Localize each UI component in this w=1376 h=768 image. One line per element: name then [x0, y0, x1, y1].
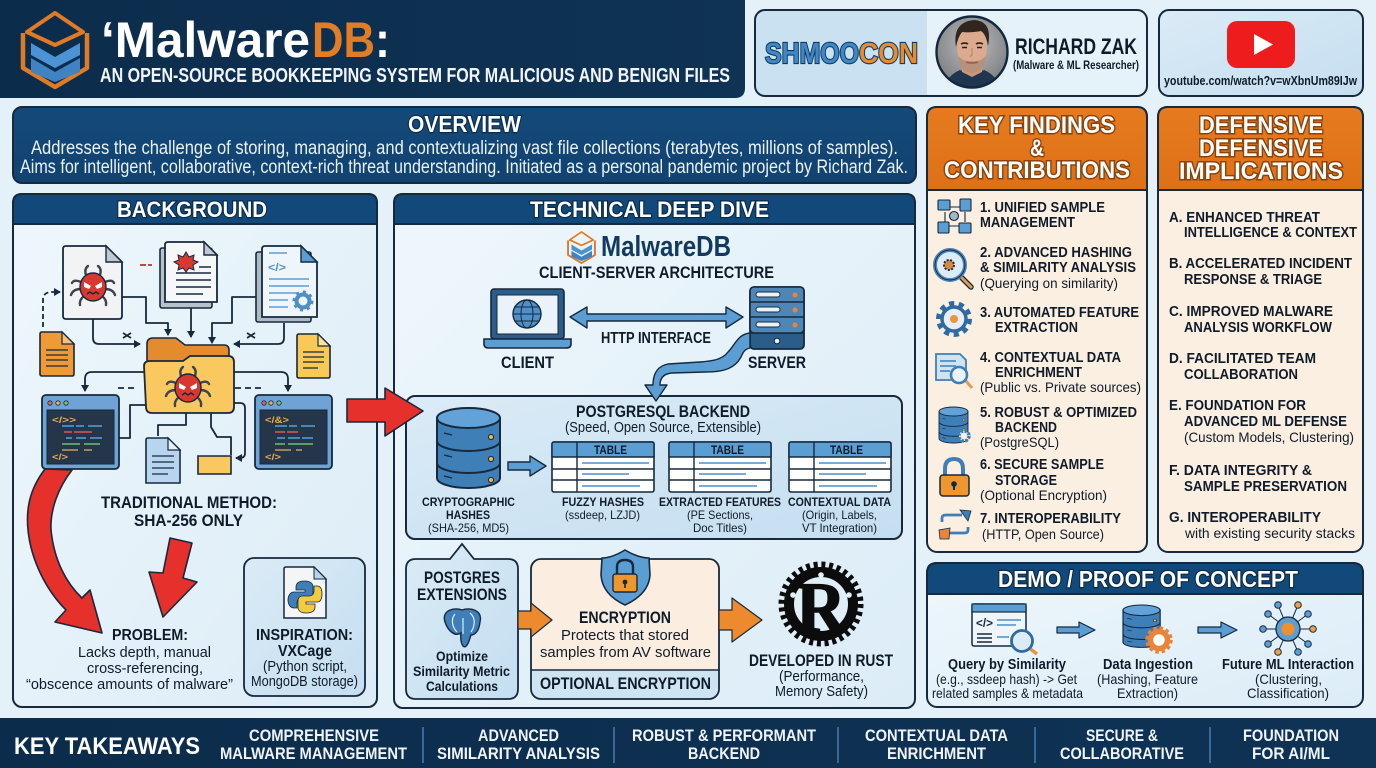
icon: left code window: </> [52, 452, 68, 462]
icon: right code window: </> [265, 452, 281, 462]
speaker portrait [936, 16, 1008, 90]
icon: small yellow folder [198, 456, 231, 474]
takeaway: comprehensive malware management: COMPREHENSIVE [249, 726, 379, 745]
title: ‘Malware [101, 12, 310, 68]
finding 4: ENRICHMENT [995, 365, 1082, 381]
heading: postgresql backend: POSTGRESQL BACKEND [576, 402, 750, 421]
finding 5: BACKEND [995, 420, 1057, 436]
label: extracted features: (PE Sections, [687, 508, 753, 522]
icon: encryption shield [601, 550, 650, 605]
speaker card [755, 10, 1147, 96]
label: fuzzy hashes: (ssdeep, LZJD) [565, 508, 640, 522]
callout: inspiration VXCage: VXCage [278, 643, 332, 660]
implications list: RESPONSE & TRIAGE [1184, 272, 1322, 288]
connector arrows [43, 265, 288, 458]
label: fuzzy hashes: FUZZY HASHES [562, 495, 644, 509]
rust text: Memory Safety) [775, 684, 868, 700]
takeaway: advanced similarity analysis: ADVANCED [478, 726, 559, 745]
finding 2 [935, 245, 1136, 291]
table: fuzzy hashes: TABLE [594, 443, 627, 457]
MalwareDB logo [568, 231, 731, 263]
panel: key findings and contributions [927, 107, 1147, 552]
takeaway: robust and performant backend: ROBUST & PERFORMANT [632, 726, 817, 745]
SHMOOCON logo: SHMOO [765, 38, 859, 70]
arrow: server to backend [645, 333, 750, 401]
client label: CLIENT [501, 353, 555, 372]
callout: inspiration VXCage: (Python script, [263, 659, 347, 675]
label: extracted features: Doc Titles) [693, 521, 747, 535]
takeaway: secure and collaborative: COLLABORATIVE [1060, 744, 1184, 763]
demo step: future ML interaction [1222, 657, 1354, 701]
callout: optional encryption: samples from AV software [540, 644, 711, 661]
server label: SERVER [748, 353, 806, 372]
icon: right code window: </&> [265, 415, 289, 425]
finding 7 [939, 510, 1121, 542]
finding 4 [936, 350, 1141, 395]
callout: postgres extensions: Optimize [436, 649, 488, 664]
icon: ML network [1260, 602, 1316, 655]
icon: small blue document [146, 438, 180, 483]
icon: code document with gear [256, 246, 317, 322]
callout: postgres extensions: Similarity Metric [413, 664, 510, 679]
arrow: demo step 1 to 2 [1057, 622, 1095, 638]
callout: inspiration VXCage: INSPIRATION: [256, 627, 353, 644]
implications list: G. INTEROPERABILITY [1169, 510, 1321, 526]
panel: defensive implications [1158, 107, 1363, 552]
speaker role: (Malware & ML Researcher) [1013, 60, 1139, 72]
arrow: straight red arrow to problem [149, 538, 197, 617]
table: extracted features [669, 442, 771, 492]
demo step: query by similarity [932, 657, 1083, 701]
callout: inspiration VXCage [244, 558, 365, 696]
takeaway: contextual data enrichment: ENRICHMENT [887, 744, 987, 763]
title: : [375, 12, 390, 68]
heading: key findings: KEY FINDINGS [958, 112, 1115, 139]
panel: overview [13, 107, 916, 183]
panel: technical deep dive [394, 194, 915, 708]
icon: Rust logo [782, 564, 860, 648]
overview text [20, 138, 908, 178]
icon: left code window [42, 395, 119, 469]
icon: server [750, 287, 804, 349]
heading: technical deep dive: TECHNICAL DEEP DIVE [530, 197, 769, 222]
callout: postgres extensions: POSTGRES [424, 569, 500, 587]
finding 7: 7. INTEROPERABILITY [980, 511, 1121, 527]
label: extracted features: EXTRACTED FEATURES [659, 495, 781, 509]
finding 6: STORAGE [995, 473, 1057, 489]
callout: optional encryption: ENCRYPTION [579, 608, 671, 627]
problem text: Lacks depth, manual [78, 644, 211, 661]
panel: demo / proof of concept [927, 563, 1363, 707]
implications list: A. ENHANCED THREAT [1169, 210, 1320, 226]
finding 6: (Optional Encryption) [980, 487, 1107, 503]
heading: key findings [944, 112, 1130, 184]
implications list: INTELLIGENCE & CONTEXT [1184, 225, 1357, 241]
demo step: data ingestion: Data Ingestion [1103, 657, 1193, 673]
takeaway: robust and performant backend: BACKEND [688, 744, 760, 763]
finding 6: 6. SECURE SAMPLE [980, 457, 1104, 473]
label: contextual data: (Origin, Labels, [802, 508, 877, 522]
takeaway: comprehensive malware management: MALWARE MANAGEMENT [220, 744, 408, 763]
implications list: C. IMPROVED MALWARE [1169, 304, 1333, 320]
label: contextual data: CONTEXTUAL DATA [788, 495, 891, 509]
takeaway: comprehensive malware management [220, 726, 408, 763]
table: extracted features: TABLE [711, 443, 744, 457]
finding 2: (Querying on similarity) [980, 275, 1118, 291]
takeaway: foundation for AI/ML: FOR AI/ML [1252, 744, 1330, 763]
demo step: query by similarity: Query by Similarity [948, 657, 1066, 673]
rust text: (Performance, [779, 669, 864, 685]
implications list: F. DATA INTEGRITY & [1169, 463, 1312, 479]
rust text [749, 652, 893, 700]
callout: postgresql backend [406, 396, 902, 539]
takeaway: foundation for AI/ML [1243, 726, 1339, 763]
implications list [1169, 210, 1357, 541]
problem text [26, 627, 233, 693]
postgresql backend subtitle: (Speed, Open Source, Extensible) [565, 419, 761, 436]
icon: laptop client [484, 289, 571, 348]
arrow: encryption to rust [719, 598, 762, 642]
demo step: query by similarity: related samples & metadata [932, 685, 1083, 701]
rust text: DEVELOPED IN RUST [749, 652, 893, 670]
label: cryptographic hashes: (SHA-256, MD5) [428, 521, 509, 535]
icon: threat report document [160, 242, 217, 308]
MalwareDB logo: MalwareDB [601, 231, 731, 263]
arrow: HTTP interface double arrow [570, 307, 743, 328]
icon: code document with gear: </> [268, 262, 286, 274]
implications list: SAMPLE PRESERVATION [1184, 479, 1347, 495]
icon: document with magnifier [936, 354, 972, 388]
heading: defensive implications: DEFENSIVE [1199, 135, 1323, 162]
demo step: data ingestion: Extraction) [1117, 685, 1178, 701]
finding 7: (HTTP, Open Source) [982, 526, 1104, 542]
heading: key findings: & [1030, 135, 1044, 162]
table: fuzzy hashes [552, 442, 654, 492]
label: cryptographic hashes: CRYPTOGRAPHIC [422, 495, 515, 509]
callout: optional encryption: OPTIONAL ENCRYPTION [540, 675, 711, 693]
demo step: query by similarity: (e.g., ssdeep hash) -> Get [936, 671, 1077, 687]
speaker name: RICHARD ZAK [1015, 34, 1137, 59]
label: extracted features [659, 495, 781, 535]
icon: query window with magnifier: </> [976, 616, 993, 630]
heading: client-server architecture: CLIENT-SERVER ARCHITECTURE [539, 263, 774, 282]
heading: key takeaways: KEY TAKEAWAYS [14, 733, 200, 760]
HTTP interface label: HTTP INTERFACE [601, 330, 711, 347]
heading: traditional method: TRADITIONAL METHOD: [101, 494, 277, 512]
problem text: “obscence amounts of malware” [26, 676, 233, 693]
callout: postgres extensions: Calculations [426, 679, 498, 694]
label: fuzzy hashes [562, 495, 644, 522]
icon: YouTube play [1227, 21, 1295, 68]
panel: background [13, 194, 377, 707]
finding 1: 1. UNIFIED SAMPLE [980, 200, 1105, 216]
finding 3 [939, 304, 1139, 336]
callout: postgres extensions: EXTENSIONS [417, 586, 507, 604]
icon: left code window: </>> [52, 415, 76, 425]
finding 1 [938, 199, 1105, 233]
finding 6 [940, 457, 1107, 503]
implications list: ADVANCED ML DEFENSE [1184, 414, 1347, 430]
overview text: Addresses the challenge of storing, managing, and contextualizing vast file collections (terabytes, millions of samples). [31, 138, 898, 159]
icon: Rust logo: R [796, 568, 847, 648]
title banner [0, 0, 745, 98]
implications list: (Custom Models, Clustering) [1184, 429, 1354, 445]
heading: defensive implications [1179, 112, 1343, 185]
implications list: B. ACCELERATED INCIDENT [1169, 256, 1352, 272]
icon: postgres elephant [444, 609, 480, 647]
icon: database with gear [939, 407, 969, 443]
heading: defensive implications: IMPLICATIONS [1179, 158, 1343, 185]
heading: demo: DEMO / PROOF OF CONCEPT [998, 566, 1298, 592]
heading: key findings: CONTRIBUTIONS [944, 157, 1130, 184]
subtitle: AN OPEN-SOURCE BOOKKEEPING SYSTEM FOR MALICIOUS AND BENIGN FILES [100, 65, 730, 87]
finding 3: EXTRACTION [995, 320, 1078, 336]
finding 1: MANAGEMENT [980, 215, 1075, 231]
callout: postgres extensions [406, 544, 518, 699]
label: cryptographic hashes [422, 495, 515, 535]
label: contextual data [788, 495, 891, 535]
icon: orange document [40, 332, 74, 376]
problem text: PROBLEM: [112, 627, 188, 644]
heading: traditional method: SHA-256 ONLY [134, 512, 243, 530]
callout: inspiration VXCage: MongoDB storage) [251, 674, 358, 690]
heading: traditional method [101, 494, 277, 530]
icon: magnifier with gear [935, 250, 971, 287]
heading: overview: OVERVIEW [408, 111, 521, 137]
icon: gear with bug [939, 304, 969, 334]
finding 5 [939, 405, 1137, 450]
video link card [1159, 10, 1363, 96]
takeaway: secure and collaborative: SECURE & [1086, 726, 1158, 745]
callout: optional encryption: Protects that stored [561, 627, 689, 644]
icon: interoperability arrows [939, 510, 971, 539]
implications list: with existing security stacks [1184, 525, 1355, 541]
callout: optional encryption [531, 550, 719, 699]
icon: MalwareDB cube logo [23, 13, 87, 87]
takeaway: advanced similarity analysis: SIMILARITY ANALYSIS [437, 744, 600, 763]
icon: unified management network [938, 199, 971, 233]
demo step: future ML interaction: Classification) [1247, 685, 1329, 701]
overview text: Aims for intelligent, collaborative, context-rich threat understanding. Initiated as a personal pandemic project by Richard Zak. [20, 157, 908, 178]
icon: database with gear [1123, 605, 1171, 652]
arrow: curved red arrow to problem [27, 469, 102, 633]
icon: malware file [63, 246, 122, 319]
implications list: ANALYSIS WORKFLOW [1184, 320, 1332, 336]
icon: python file [284, 567, 326, 618]
finding 2: 2. ADVANCED HASHING [980, 245, 1132, 261]
takeaway: foundation for AI/ML: FOUNDATION [1243, 726, 1339, 745]
problem text: cross-referencing, [87, 660, 203, 677]
icon: query window with magnifier [972, 604, 1037, 654]
key takeaways bar [0, 718, 1376, 768]
finding 2: & SIMILARITY ANALYSIS [980, 260, 1136, 276]
heading: background: BACKGROUND [117, 197, 267, 222]
icon: database [437, 408, 500, 488]
heading: defensive implications: DEFENSIVE [1199, 112, 1323, 139]
takeaway: secure and collaborative [1060, 726, 1184, 763]
takeaway: contextual data enrichment [865, 726, 1008, 763]
finding 4: 4. CONTEXTUAL DATA [980, 350, 1121, 366]
icon: right code window [255, 395, 332, 469]
finding 5: 5. ROBUST & OPTIMIZED [980, 405, 1137, 421]
finding 5: (PostgreSQL) [980, 434, 1059, 450]
arrow: extensions to encryption [518, 603, 552, 637]
label: contextual data: VT Integration) [802, 521, 877, 535]
takeaway: advanced similarity analysis [437, 726, 600, 763]
implications list: D. FACILITATED TEAM [1169, 351, 1316, 367]
implications list: E. FOUNDATION FOR [1169, 398, 1306, 414]
arrow: red arrow from background to technical [347, 388, 423, 436]
demo step: data ingestion: (Hashing, Feature [1097, 671, 1198, 687]
demo step: future ML interaction: (Clustering, [1255, 671, 1322, 687]
takeaway: contextual data enrichment: CONTEXTUAL DATA [865, 726, 1008, 745]
arrow: database to tables [508, 456, 546, 476]
icon: yellow document [297, 334, 330, 378]
demo step: data ingestion [1097, 657, 1198, 701]
SHMOOCON logo: CON [859, 38, 918, 70]
demo step: future ML interaction: Future ML Interaction [1222, 657, 1354, 673]
implications list: COLLABORATION [1184, 367, 1298, 383]
table: contextual data: TABLE [830, 443, 863, 457]
finding 4: (Public vs. Private sources) [980, 379, 1141, 395]
finding 3: 3. AUTOMATED FEATURE [980, 305, 1139, 321]
takeaway: robust and performant backend [632, 726, 817, 763]
icon: malware folder [144, 338, 234, 413]
label: cryptographic hashes: HASHES [446, 508, 490, 522]
icon: padlock [940, 459, 969, 496]
arrow: demo step 2 to 3 [1198, 622, 1237, 638]
title: DB [312, 12, 375, 68]
table: contextual data [789, 442, 891, 492]
